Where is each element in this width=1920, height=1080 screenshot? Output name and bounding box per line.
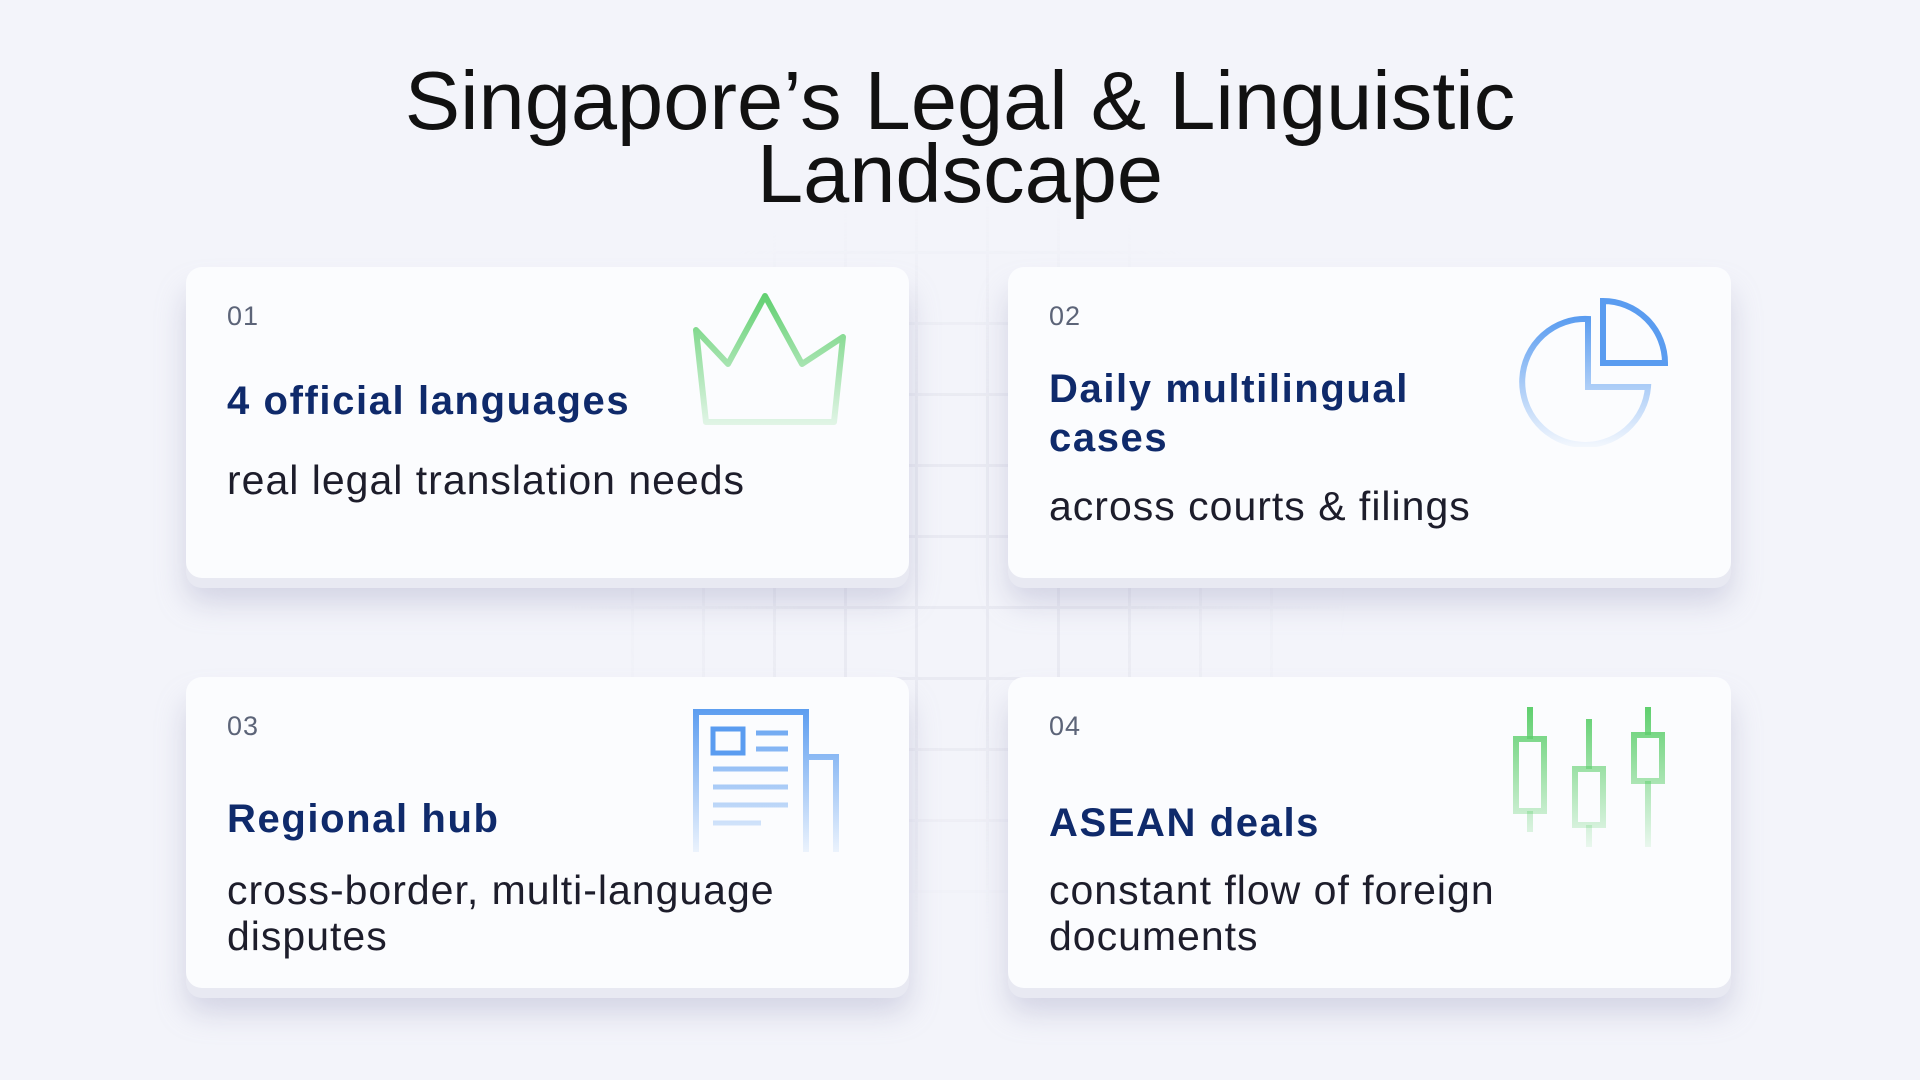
body 03: cross-border, multi-language xyxy=(227,867,775,913)
heading 01: 4 official languages xyxy=(227,379,630,423)
heading 02 xyxy=(1049,367,1409,460)
panel: 04 xyxy=(1008,677,1731,988)
body 03 xyxy=(227,867,775,959)
title: Singapore’s Legal & Linguistic xyxy=(405,54,1515,147)
body 04 xyxy=(1049,867,1495,959)
icon: crown xyxy=(693,293,846,425)
body 02: across courts & filings xyxy=(1049,483,1471,529)
heading 03: Regional hub xyxy=(227,797,500,841)
heading 02: cases xyxy=(1049,416,1168,460)
title xyxy=(405,54,1515,220)
panel: 03: 03 xyxy=(227,711,259,741)
panel: 01: 01 xyxy=(227,301,259,331)
body 03: disputes xyxy=(227,913,388,959)
panel: 04: 04 xyxy=(1049,711,1081,741)
panel: 03 xyxy=(186,677,909,988)
body 04: documents xyxy=(1049,913,1259,959)
icon: pie chart xyxy=(1519,298,1668,447)
heading 04: ASEAN deals xyxy=(1049,801,1320,845)
icon: newspaper xyxy=(693,709,839,852)
icon: candlesticks xyxy=(1513,707,1665,847)
body 04: constant flow of foreign xyxy=(1049,867,1495,913)
panel: 02: 02 xyxy=(1049,301,1081,331)
panel: 02 xyxy=(1008,267,1731,578)
panel: 01 xyxy=(186,267,909,578)
title: Landscape xyxy=(757,127,1163,220)
heading 02: Daily multilingual xyxy=(1049,367,1409,411)
body 01: real legal translation needs xyxy=(227,457,745,503)
